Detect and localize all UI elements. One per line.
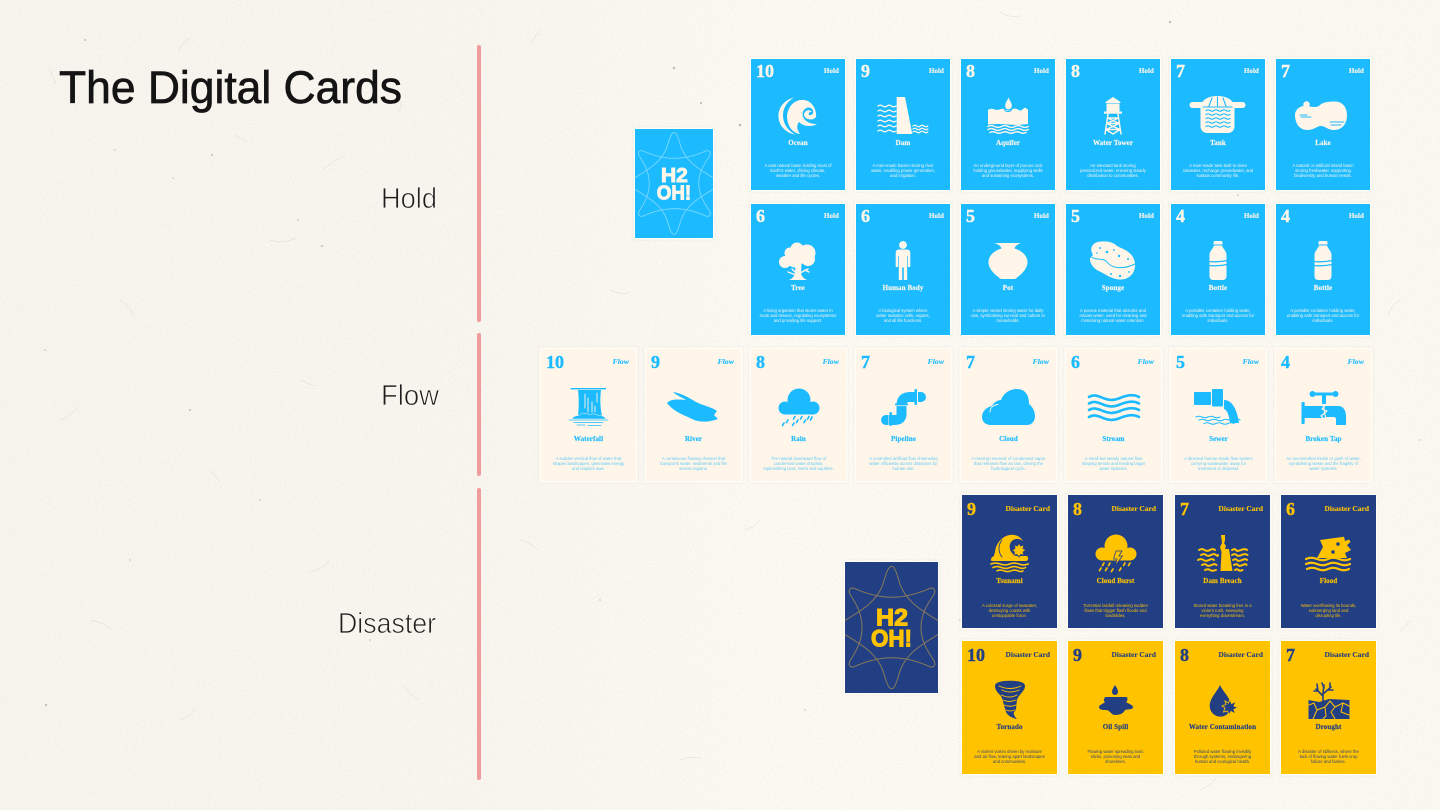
description: A man-made tank built to store bbox=[1189, 163, 1247, 168]
icon: tornado bbox=[980, 674, 1040, 724]
icon: bottle bbox=[1210, 241, 1226, 280]
category: Flow bbox=[613, 357, 629, 366]
description: human use. bbox=[892, 466, 915, 471]
name: Human Body bbox=[883, 284, 923, 292]
name: Sponge bbox=[1102, 284, 1124, 292]
description: A directed human-made flow system bbox=[1184, 456, 1253, 460]
card: Sewer bbox=[1171, 349, 1266, 481]
number: 7 bbox=[1176, 61, 1185, 81]
number: 7 bbox=[966, 352, 975, 372]
description: individuals. bbox=[1312, 318, 1334, 323]
description: human and ecological health. bbox=[1195, 759, 1250, 764]
description bbox=[1281, 602, 1376, 618]
card back: Hold: H2 bbox=[661, 165, 688, 187]
description: rainwater, recharge groundwater, and bbox=[1183, 168, 1253, 173]
name: Ocean bbox=[788, 139, 808, 147]
description bbox=[1066, 456, 1161, 471]
card: Tank bbox=[1171, 59, 1265, 190]
description: water efficiently across distances for bbox=[869, 461, 938, 466]
description: replenishing land, rivers and aquifers. bbox=[763, 466, 834, 471]
description: A disaster of stillness, where the bbox=[1298, 748, 1359, 754]
card back: Disaster bbox=[845, 562, 938, 693]
divider: Disaster section bbox=[477, 488, 480, 780]
name: Aquifer bbox=[996, 139, 1020, 147]
icon: tank bbox=[1190, 96, 1246, 133]
description bbox=[973, 163, 1043, 178]
section label: Flow: Flow bbox=[381, 380, 440, 412]
description bbox=[1171, 456, 1266, 471]
card: Aquifer bbox=[961, 59, 1055, 190]
description: use, symbolising survival and culture in bbox=[971, 313, 1045, 318]
title: The Digital Cards bbox=[59, 62, 402, 113]
icon: river bbox=[667, 392, 718, 422]
name: Tsunami bbox=[996, 577, 1023, 585]
description: A colossal surge of seawater, bbox=[982, 602, 1037, 608]
number: 9 bbox=[651, 352, 660, 372]
number: 10 bbox=[756, 61, 774, 81]
card: Bottle bbox=[1171, 204, 1265, 335]
description: Polluted water flowing invisibly bbox=[1194, 748, 1251, 754]
icon: water tower bbox=[1104, 97, 1122, 135]
description: A natural or artificial inland basin bbox=[1292, 163, 1354, 168]
description: A controlled artificial flow channeling bbox=[869, 456, 938, 460]
card: Waterfall bbox=[541, 349, 636, 481]
description: The natural downward flow of bbox=[771, 456, 826, 460]
category: Hold bbox=[929, 67, 944, 75]
icon: sponge bbox=[1090, 241, 1136, 280]
description: through systems, endangering bbox=[1194, 754, 1251, 759]
name: Waterfall bbox=[574, 435, 603, 443]
name: Oil Spill bbox=[1103, 723, 1128, 731]
number: 5 bbox=[966, 206, 975, 226]
name: Pot bbox=[1003, 284, 1013, 292]
category: Hold bbox=[1349, 212, 1364, 220]
description: distribution to communities. bbox=[1087, 173, 1139, 178]
description: hydrological cycle. bbox=[991, 466, 1026, 471]
card: Drought bbox=[1281, 641, 1376, 774]
description: submerging land and bbox=[1309, 608, 1348, 613]
category: Hold bbox=[824, 67, 839, 75]
description: A sudden vertical flow of water that bbox=[556, 456, 621, 460]
card: Sponge bbox=[1066, 204, 1160, 335]
description: and all life functions. bbox=[884, 318, 922, 323]
number: 4 bbox=[1281, 352, 1290, 372]
card: Pot bbox=[961, 204, 1055, 335]
category: Hold bbox=[824, 212, 839, 220]
number: 8 bbox=[1073, 499, 1082, 519]
description: A living organism that stores water in bbox=[763, 308, 833, 313]
card: Rain bbox=[751, 349, 846, 481]
number: 6 bbox=[1071, 352, 1080, 372]
description: carrying wastewater away for bbox=[1191, 461, 1246, 466]
description: and inspires awe. bbox=[572, 466, 605, 471]
description: shapes landscapes, generates energy bbox=[553, 461, 624, 466]
description: individuals. bbox=[1207, 318, 1229, 323]
name: Rain bbox=[791, 435, 806, 443]
name: Flood bbox=[1320, 577, 1337, 585]
icon: drought bbox=[1298, 674, 1358, 724]
category: Flow bbox=[1138, 357, 1154, 366]
description: lack of flowing water fuels crop bbox=[1300, 754, 1357, 759]
number: 10 bbox=[967, 645, 985, 665]
description bbox=[552, 456, 624, 471]
number: 6 bbox=[1286, 499, 1295, 519]
card: Tornado bbox=[962, 641, 1057, 774]
name: Bottle bbox=[1209, 284, 1227, 292]
description: A small but steady natural flow bbox=[1085, 456, 1142, 460]
description: Flowing water spreading toxic bbox=[1088, 748, 1144, 754]
description: across regions. bbox=[679, 466, 708, 471]
description: water, enabling power generation, bbox=[871, 168, 935, 173]
card: Cloud bbox=[961, 349, 1056, 481]
description: holding groundwater, supplying wells bbox=[973, 168, 1043, 173]
card: River bbox=[646, 349, 741, 481]
name: Tree bbox=[791, 284, 805, 292]
category: Hold bbox=[929, 212, 944, 220]
description bbox=[764, 163, 832, 178]
description: water systems. bbox=[1309, 466, 1338, 471]
card: Dam bbox=[856, 59, 950, 190]
description: water sustains cells, organs, bbox=[876, 313, 930, 318]
description: shorelines. bbox=[1105, 759, 1126, 764]
name: River bbox=[685, 435, 702, 443]
card back: Hold: OH! bbox=[657, 182, 691, 204]
description bbox=[660, 456, 727, 471]
section label: Hold: Hold bbox=[381, 183, 437, 215]
description: households. bbox=[997, 318, 1019, 323]
description bbox=[1068, 748, 1163, 764]
description: An uncontrolled trickle or gush of water, bbox=[1286, 456, 1361, 460]
description: that releases flow as rain, driving the bbox=[974, 461, 1043, 466]
category: Disaster Card bbox=[1111, 504, 1156, 513]
category: Hold bbox=[1034, 212, 1049, 220]
category: Disaster Card bbox=[1005, 504, 1050, 513]
description bbox=[971, 308, 1045, 323]
number: 9 bbox=[1073, 645, 1082, 665]
number: 8 bbox=[1180, 645, 1189, 665]
category: Disaster Card bbox=[1324, 504, 1369, 513]
description: and providing life support. bbox=[774, 318, 822, 323]
icon: dam breach bbox=[1192, 528, 1252, 578]
icon: cloud burst bbox=[1086, 528, 1146, 578]
number: 5 bbox=[1071, 206, 1080, 226]
description bbox=[876, 308, 930, 323]
card: Pipeline bbox=[856, 349, 951, 481]
description bbox=[1175, 602, 1270, 618]
name: Water Tower bbox=[1093, 139, 1133, 147]
description bbox=[972, 456, 1046, 471]
card: Tree bbox=[751, 204, 845, 335]
name: Cloud bbox=[999, 435, 1018, 443]
name: Broken Tap bbox=[1305, 435, 1342, 443]
name: Dam bbox=[896, 139, 910, 147]
category: Flow bbox=[928, 357, 944, 366]
icon: rain cloud bbox=[778, 388, 820, 426]
icon: contaminated water drop bbox=[1192, 674, 1252, 724]
description: symbolising waste and the fragility of bbox=[1289, 461, 1358, 466]
panel: Hold cards bbox=[634, 58, 1372, 336]
description: A violent vortex driven by moisture bbox=[977, 748, 1042, 754]
panel: Disaster cards bbox=[843, 493, 1379, 776]
description: Stored water breaking free in a bbox=[1193, 602, 1252, 608]
card back: Disaster: OH! bbox=[871, 626, 912, 653]
name: Drought bbox=[1316, 723, 1341, 731]
description bbox=[871, 163, 935, 178]
description: unstoppable force. bbox=[992, 613, 1027, 618]
description: landslides. bbox=[1105, 613, 1126, 618]
name: Water Contamination bbox=[1189, 723, 1256, 731]
number: 8 bbox=[966, 61, 975, 81]
card: Water Tower bbox=[1066, 59, 1160, 190]
description: condensed water droplets, bbox=[774, 461, 823, 466]
icon: human body bbox=[896, 241, 910, 280]
card back: Disaster: H2 bbox=[876, 604, 908, 632]
name: Sewer bbox=[1209, 435, 1228, 443]
icon: lake bbox=[1295, 101, 1347, 130]
number: 6 bbox=[861, 206, 870, 226]
card: Tsunami bbox=[962, 495, 1057, 628]
description: slicks, poisoning seas and bbox=[1091, 754, 1140, 759]
description: A vast natural basin holding most of bbox=[764, 163, 832, 168]
section label: Disaster: Disaster bbox=[338, 608, 436, 640]
name: Bottle bbox=[1314, 284, 1332, 292]
icon: broken tap bbox=[1294, 382, 1354, 432]
description: violent rush, sweeping bbox=[1201, 608, 1244, 613]
card: Broken Tap bbox=[1276, 349, 1371, 481]
category: Flow bbox=[718, 357, 734, 366]
card: Human Body bbox=[856, 204, 950, 335]
description: water systems. bbox=[1099, 466, 1128, 471]
category: Hold bbox=[1349, 67, 1364, 75]
description: and communities. bbox=[993, 759, 1026, 764]
description: A simple vessel storing water for daily bbox=[973, 308, 1043, 313]
icon: ocean wave bbox=[778, 98, 817, 134]
name: Lake bbox=[1315, 139, 1331, 147]
icon: dam bbox=[877, 97, 928, 134]
description: mimicking natural water retention. bbox=[1081, 318, 1145, 323]
description: and irrigation. bbox=[890, 173, 916, 178]
name: Pipeline bbox=[891, 435, 916, 443]
card: Stream bbox=[1066, 349, 1161, 481]
description bbox=[1287, 308, 1359, 323]
description: enabling safe transport and access for bbox=[1182, 313, 1254, 318]
description: weather and life cycles. bbox=[776, 173, 820, 178]
number: 9 bbox=[861, 61, 870, 81]
description bbox=[763, 456, 834, 471]
name: Tornado bbox=[996, 723, 1023, 731]
description bbox=[1182, 308, 1254, 323]
number: 7 bbox=[1286, 645, 1295, 665]
category: Hold bbox=[1244, 212, 1259, 220]
description: everything downstream. bbox=[1200, 613, 1245, 618]
description: treatment or disposal. bbox=[1198, 466, 1239, 471]
icon: cloud bbox=[982, 389, 1035, 425]
card: Bottle (second copy) bbox=[1276, 204, 1370, 335]
number: 8 bbox=[1071, 61, 1080, 81]
description: A portable container holding water, bbox=[1290, 308, 1356, 313]
name: Stream bbox=[1102, 435, 1125, 443]
divider: Flow section bbox=[477, 333, 480, 476]
category: Hold bbox=[1139, 212, 1154, 220]
category: Hold bbox=[1034, 67, 1049, 75]
icon: tsunami bbox=[980, 528, 1040, 578]
number: 4 bbox=[1281, 206, 1290, 226]
panel: Flow cards bbox=[540, 348, 1372, 482]
name: Tank bbox=[1210, 139, 1226, 147]
description: roots and tissues, regulating ecosystems bbox=[760, 313, 836, 318]
icon: sewer bbox=[1188, 382, 1248, 432]
icon: oil spill bbox=[1086, 674, 1146, 724]
description: Water overflowing its bounds, bbox=[1301, 602, 1356, 608]
icon: tree bbox=[779, 242, 816, 280]
description: A porous material that absorbs and bbox=[1080, 308, 1146, 313]
category: Flow bbox=[1348, 357, 1364, 366]
category: Disaster Card bbox=[1005, 650, 1050, 659]
number: 4 bbox=[1176, 206, 1185, 226]
card: Oil Spill bbox=[1068, 641, 1163, 774]
card back: Hold bbox=[635, 129, 713, 238]
category: Hold bbox=[1244, 67, 1259, 75]
category: Disaster Card bbox=[1218, 504, 1263, 513]
number: 7 bbox=[1180, 499, 1189, 519]
category: Hold bbox=[1139, 67, 1154, 75]
description bbox=[1276, 456, 1371, 471]
description: Earth's water, driving climate, bbox=[770, 168, 826, 173]
description: and air flow, tearing apart landscapes bbox=[974, 754, 1045, 759]
category: Disaster Card bbox=[1324, 650, 1369, 659]
description: enabling safe transport and access for bbox=[1287, 313, 1359, 318]
description: A continuous flowing channel that bbox=[662, 456, 725, 460]
description: Torrential rainfall releasing sudden bbox=[1083, 602, 1148, 608]
icon: stream bbox=[1084, 382, 1144, 432]
description: biodiversity and human needs. bbox=[1294, 173, 1352, 178]
number: 7 bbox=[1281, 61, 1290, 81]
description: and sustaining ecosystems. bbox=[982, 173, 1034, 178]
category: Disaster Card bbox=[1111, 650, 1156, 659]
number: 9 bbox=[967, 499, 976, 519]
description: An underground layer of porous rock bbox=[974, 163, 1042, 168]
description: An elevated tank storing bbox=[1090, 163, 1136, 168]
description bbox=[869, 456, 938, 471]
card: Flood bbox=[1281, 495, 1376, 628]
number: 7 bbox=[861, 352, 870, 372]
divider: Hold section bbox=[477, 45, 480, 322]
category: Disaster Card bbox=[1218, 650, 1263, 659]
icon: pipeline bbox=[881, 389, 926, 426]
description: sustain community life. bbox=[1196, 173, 1240, 178]
description: shaping terrain and feeding larger bbox=[1082, 461, 1145, 466]
card: Water Contamination bbox=[1175, 641, 1270, 774]
number: 5 bbox=[1176, 352, 1185, 372]
description: transports water, sediments and life bbox=[660, 461, 727, 466]
description: A portable container holding water, bbox=[1185, 308, 1251, 313]
description bbox=[1175, 748, 1270, 764]
card: Cloud Burst bbox=[1068, 495, 1163, 628]
description: flows that trigger flash floods and bbox=[1084, 608, 1147, 613]
description bbox=[1292, 163, 1354, 178]
description bbox=[1183, 163, 1253, 178]
description bbox=[760, 308, 836, 323]
icon: waterfall bbox=[568, 388, 608, 426]
description: A man-made barrier storing river bbox=[873, 163, 933, 168]
description bbox=[1068, 602, 1163, 618]
number: 10 bbox=[546, 352, 564, 372]
icon: bottle bbox=[1314, 241, 1332, 280]
description: failure and famine. bbox=[1311, 759, 1346, 764]
description: retains water, used for cleaning and bbox=[1079, 313, 1147, 318]
description bbox=[1080, 163, 1146, 178]
card: Lake bbox=[1276, 59, 1370, 190]
description bbox=[962, 748, 1057, 764]
description: storing freshwater, supporting bbox=[1295, 168, 1351, 173]
description: pressurized water, ensuring steady bbox=[1080, 168, 1146, 173]
icon: aquifer bbox=[987, 98, 1029, 134]
card: Ocean bbox=[751, 59, 845, 190]
name: Cloud Burst bbox=[1097, 577, 1134, 585]
card: Dam Breach bbox=[1175, 495, 1270, 628]
icon: pot bbox=[988, 243, 1028, 279]
description bbox=[962, 602, 1057, 618]
description: A moving reservoir of condensed vapor bbox=[972, 456, 1045, 460]
description: destroying coasts with bbox=[989, 608, 1030, 613]
category: Flow bbox=[823, 357, 839, 366]
description bbox=[1281, 748, 1376, 764]
category: Flow bbox=[1033, 357, 1049, 366]
category: Flow bbox=[1243, 357, 1259, 366]
number: 6 bbox=[756, 206, 765, 226]
description: A biological system where bbox=[879, 308, 927, 313]
number: 8 bbox=[756, 352, 765, 372]
icon: flood bbox=[1298, 528, 1358, 578]
description bbox=[1079, 308, 1147, 323]
name: Dam Breach bbox=[1203, 577, 1242, 585]
description: disrupting life. bbox=[1315, 613, 1342, 618]
